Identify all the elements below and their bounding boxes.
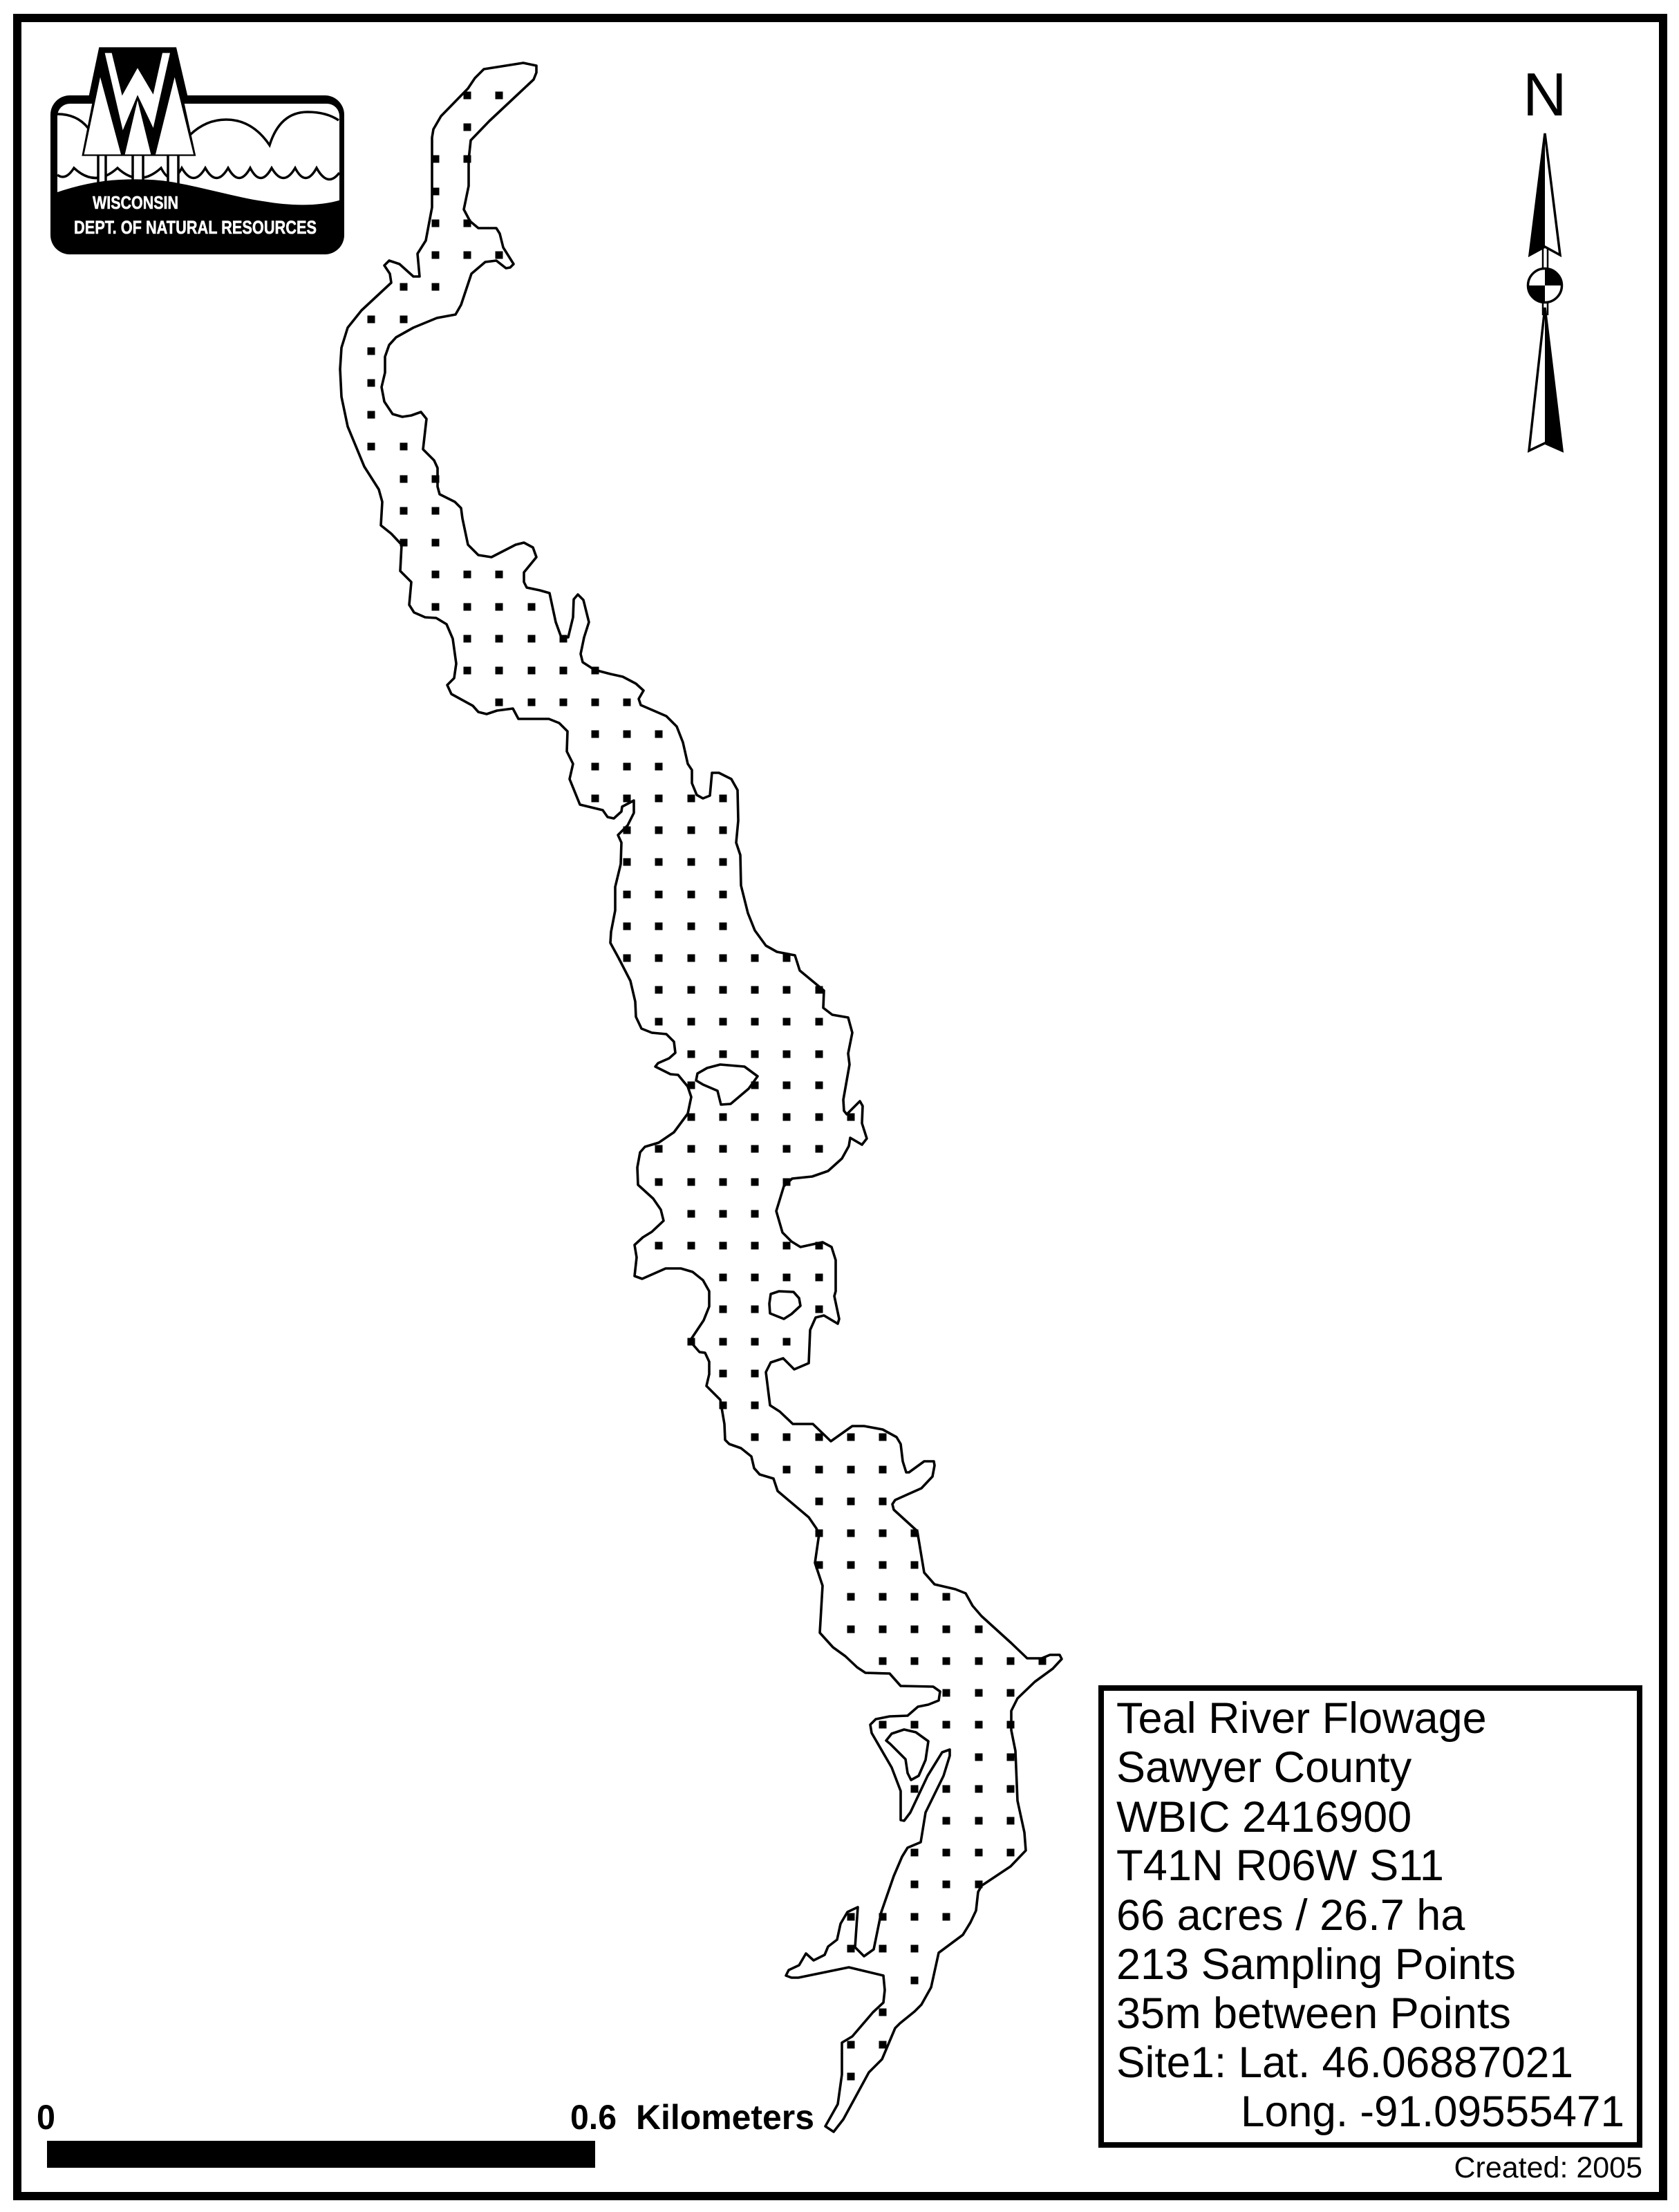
logo ground [55,179,341,238]
info text: Sawyer County [1116,1743,1412,1792]
created date: Created: 2005 [1454,2151,1642,2184]
logo text: WISCONSIN [93,192,178,213]
north arrow [1523,60,1567,451]
scale bar [37,2098,814,2168]
lake outline [340,63,1062,2132]
info text: 35m between Points [1116,1989,1511,2038]
logo waves [57,168,339,179]
info text: Site1: Lat. 46.06887021 [1116,2038,1573,2087]
logo hills [57,112,339,145]
info text: Long. -91.09555471 [1241,2088,1624,2136]
north letter: N [1523,60,1567,129]
logo: Wisconsin DNR [50,47,344,254]
logo: Wisconsin DNR: DEPT. OF NATURAL RESOURCES [74,217,317,238]
logo W and trees [75,47,202,156]
info text: Teal River Flowage [1116,1694,1487,1743]
sampling points [368,92,1046,2080]
logo tree trunks [98,153,178,187]
scale bar rectangle [47,2141,595,2168]
info text: 213 Sampling Points [1116,1940,1516,1989]
info text: WBIC 2416900 [1116,1793,1411,1841]
info panel border [1101,1688,1640,2145]
scale bar: 0.6 [570,2098,617,2137]
arrow head [1530,133,1560,255]
compass circle [1528,268,1562,303]
scale labels: 0 [37,2098,55,2137]
scale bar: Kilometers [636,2098,814,2137]
island: southern [886,1730,928,1780]
logo badge [50,95,344,254]
info text [1116,1694,1624,2136]
island: central [696,1065,758,1105]
info text: T41N R06W S11 [1116,1841,1444,1890]
arrow tail [1529,308,1562,451]
info panel [1101,1688,1640,2145]
info text: 66 acres / 26.7 ha [1116,1891,1465,1940]
island: small [769,1291,800,1319]
